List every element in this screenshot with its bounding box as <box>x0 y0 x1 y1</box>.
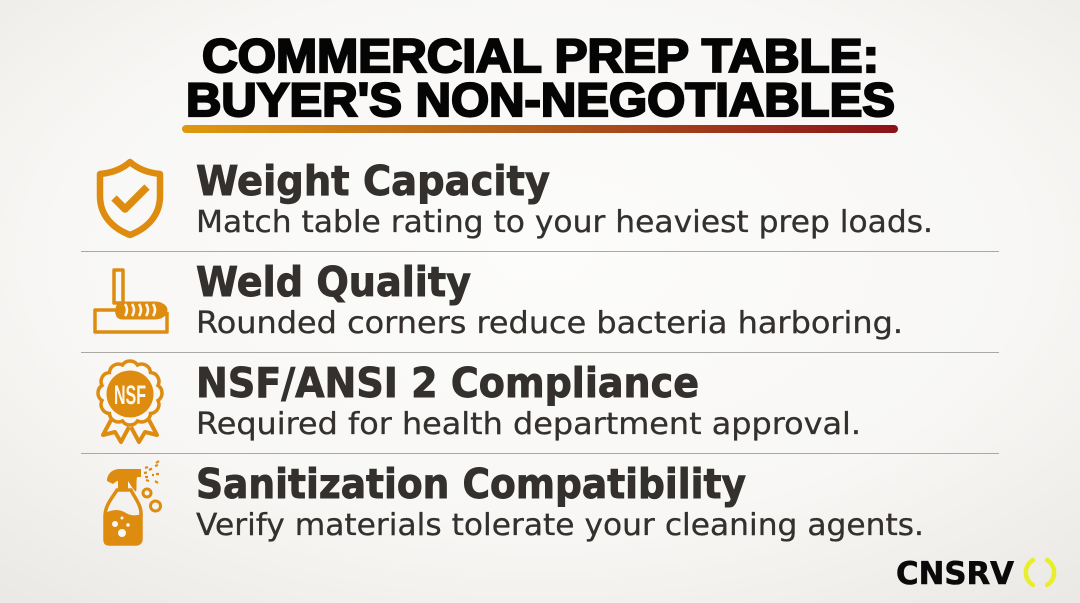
text: NSF compliance description: Required for health department approval. <box>196 407 861 442</box>
heading: sanitization compatibility: Sanitization Compatibility <box>196 460 746 508</box>
text: sanitization compatibility description: Verify materials tolerate your cleaning agents. <box>196 508 924 543</box>
icon: shield with check <box>100 162 160 235</box>
title <box>186 29 895 126</box>
icon: NSF badge <box>98 361 162 442</box>
heading: weight capacity: Weight Capacity <box>196 157 550 205</box>
title underline gradient bar <box>182 125 898 133</box>
row: weld quality <box>95 258 903 341</box>
row: NSF compliance <box>98 359 861 442</box>
icon: spray bottle <box>104 461 160 545</box>
heading: NSF compliance: NSF/ANSI 2 Compliance <box>196 359 699 407</box>
title: BUYER'S NON-NEGOTIABLES <box>186 73 895 126</box>
icon: weld joint <box>95 270 167 332</box>
icon: NSF badge: NSF <box>114 380 146 410</box>
text: weight capacity description: Match table rating to your heaviest prep loads. <box>196 205 933 240</box>
row: sanitization compatibility <box>104 460 924 545</box>
row: weight capacity <box>100 157 933 240</box>
logo: CNSRV: CNSRV <box>896 556 1014 592</box>
icon: yellow ring logo mark <box>1026 560 1054 585</box>
text: weld quality description: Rounded corners reduce bacteria harboring. <box>196 306 903 341</box>
title: COMMERCIAL PREP TABLE: <box>202 29 879 82</box>
heading: weld quality: Weld Quality <box>196 258 471 306</box>
